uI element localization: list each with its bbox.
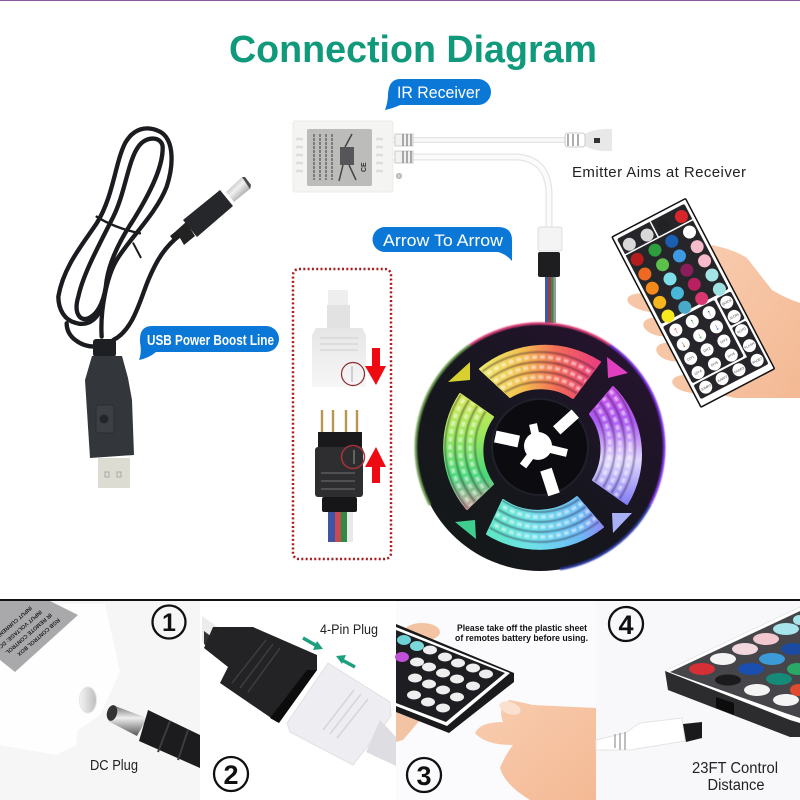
battery note — [455, 623, 588, 643]
DC Plug label: DC Plug — [90, 757, 138, 774]
grey label: CE — [361, 162, 368, 172]
button labels: FADE7 — [752, 356, 763, 365]
black plug — [315, 410, 364, 542]
step number 3 — [407, 758, 441, 792]
white cable — [366, 720, 397, 766]
side ridges — [296, 139, 383, 171]
step number 4: 4 — [618, 610, 634, 640]
panel 3: battery sheet — [395, 601, 596, 800]
black connector — [538, 252, 560, 277]
arrow glyphs on buttons: ↑ — [688, 316, 697, 327]
black plug — [204, 627, 317, 722]
fingers behind remote — [396, 623, 440, 742]
cable — [202, 616, 222, 650]
DC plug — [105, 704, 200, 768]
glowing rim — [416, 323, 664, 569]
step number 1 — [152, 606, 186, 638]
battery note: Please take off the plastic sheet — [457, 623, 587, 633]
remote body — [612, 199, 775, 407]
button labels: DIY5 — [710, 360, 719, 367]
panel 1: DC plug — [0, 601, 200, 800]
range label: 23FT Control — [692, 760, 778, 777]
emitter black tip — [594, 138, 600, 143]
arrow glyphs on buttons — [672, 307, 721, 350]
remote body — [665, 607, 800, 737]
white plug — [312, 290, 366, 387]
black sleeve — [270, 670, 317, 723]
USB body — [85, 356, 134, 458]
red arrow down — [365, 348, 386, 385]
callout: USB Power Boost Line — [139, 326, 279, 360]
USB metal tip — [98, 458, 130, 488]
strain relief — [93, 339, 116, 357]
green arrows — [303, 638, 355, 667]
battery note: of remotes battery before using. — [455, 633, 588, 643]
white spokes — [494, 410, 579, 496]
step number 2: 2 — [223, 760, 239, 790]
arrow glyphs on buttons: ↓ — [695, 330, 704, 341]
reel body — [416, 323, 664, 571]
function buttons — [667, 293, 766, 396]
remote body — [396, 624, 514, 733]
button labels: AUTO — [737, 326, 747, 335]
strip windings — [445, 352, 635, 542]
emitter cable — [393, 129, 612, 151]
white connector — [538, 227, 562, 251]
label: emitter aims at receiver: Emitter Aims at Receiver — [572, 164, 746, 181]
button labels: JUMP7 — [717, 375, 728, 383]
product label — [0, 601, 78, 672]
title: Connection Diagram — [229, 29, 597, 71]
callout: Arrow To Arrow: Arrow To Arrow — [383, 231, 504, 250]
top accent line — [0, 0, 800, 1]
IR receiver box — [293, 121, 402, 192]
range label — [692, 760, 778, 794]
callout: IR Receiver — [385, 79, 491, 110]
red arrow up — [365, 447, 386, 483]
remote buttons — [689, 615, 800, 706]
receiver cable to strip — [393, 151, 562, 323]
arrow glyphs on buttons: ↑ — [705, 307, 713, 318]
remote control — [612, 199, 775, 407]
cable loops — [58, 128, 180, 347]
arrow glyphs on buttons: ↓ — [679, 339, 688, 350]
button labels: DIY4 — [694, 369, 702, 376]
button labels: SLOW — [729, 312, 740, 321]
arrow glyphs on buttons: ↓ — [712, 321, 721, 332]
button labels: DIY2 — [703, 346, 711, 353]
hand pulling sheet — [475, 700, 596, 800]
button labels: FLASH — [744, 341, 756, 350]
product label: RGB CONTROL BOX — [15, 616, 61, 657]
black button field — [617, 203, 769, 399]
step number 2 — [214, 757, 248, 791]
button labels: DIY3 — [720, 337, 728, 345]
corner triangles — [448, 357, 632, 539]
step number 4 — [609, 607, 643, 641]
USB button — [96, 405, 114, 433]
range label: Distance — [708, 777, 764, 794]
controller body — [0, 604, 120, 755]
panel: arrow alignment — [293, 269, 391, 559]
button labels: DIY6 — [727, 352, 736, 359]
DC plug — [170, 177, 251, 245]
step number 1: 1 — [162, 609, 176, 637]
hand holding remote — [626, 245, 800, 398]
button labels: QUICK — [721, 298, 733, 307]
white plug — [287, 663, 391, 765]
callout: USB Power Boost Line: USB Power Boost Line — [147, 332, 274, 349]
step number 3: 3 — [416, 761, 432, 791]
background — [201, 601, 396, 800]
button labels: DIY1 — [686, 355, 695, 362]
dotted frame — [293, 269, 391, 559]
callout: IR Receiver: IR Receiver — [397, 84, 480, 102]
panel 4: remote range — [596, 601, 800, 800]
hub — [492, 399, 588, 495]
button labels — [670, 298, 764, 392]
background — [396, 601, 596, 800]
LED strip reel — [416, 323, 664, 571]
fingers — [626, 290, 713, 396]
colour buttons — [628, 223, 728, 325]
product label: IR REMOTE CONTROL — [3, 611, 53, 655]
top buttons — [620, 208, 690, 253]
palm — [690, 245, 800, 398]
background — [596, 601, 800, 800]
panel 2: 4-pin plug — [201, 601, 397, 800]
socket hole — [80, 687, 96, 713]
USB power boost cable — [58, 128, 251, 488]
4-Pin Plug label: 4-Pin Plug — [320, 622, 378, 637]
connector — [596, 718, 702, 750]
divider line over photo row — [0, 599, 800, 601]
remote buttons — [395, 635, 493, 712]
arrow glyphs on buttons: ↑ — [672, 325, 680, 335]
background — [0, 601, 200, 800]
callout: Arrow To Arrow — [372, 227, 512, 261]
socket — [716, 697, 734, 715]
button labels: JUMP3 — [700, 383, 712, 392]
LED windows — [444, 346, 641, 549]
RGB wires — [545, 277, 556, 323]
thumbnail — [498, 699, 522, 717]
button labels: FADE3 — [734, 366, 745, 374]
